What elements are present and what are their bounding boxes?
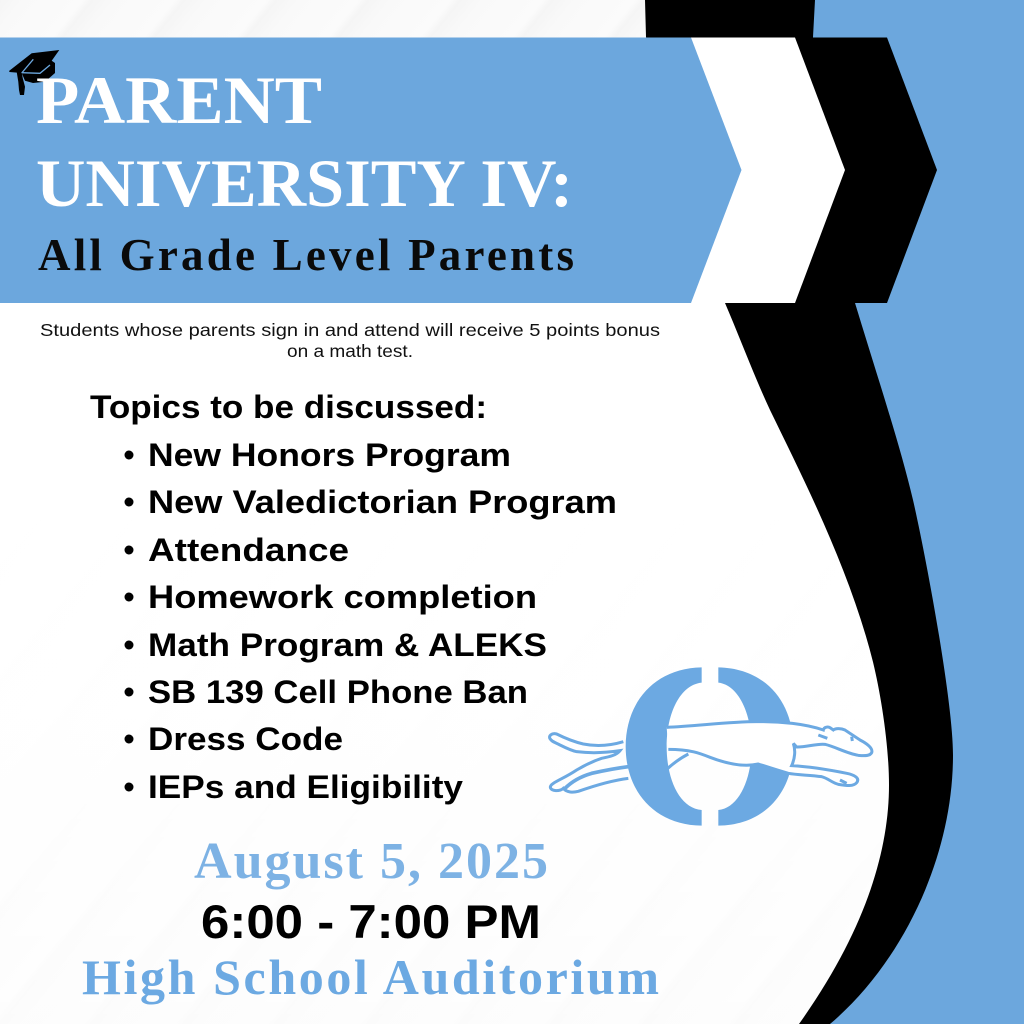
date: August 5, 2025	[194, 833, 548, 890]
topics heading: Topics to be discussed:	[90, 389, 487, 425]
black chevron	[780, 38, 937, 303]
title: UNIVERSITY IV:	[36, 145, 573, 221]
time: 6:00 - 7:00 PM	[201, 895, 541, 948]
title	[36, 62, 573, 221]
black swoosh	[645, 0, 953, 1024]
bonus note: Students whose parents sign in and attend will receive 5 points bonus	[40, 320, 660, 340]
item: Homework completion	[148, 579, 537, 615]
item: New Valedictorian Program	[148, 484, 617, 520]
item: Attendance	[148, 532, 349, 568]
topics list	[124, 437, 617, 805]
item: IEPs and Eligibility	[148, 769, 463, 805]
location: High School Auditorium	[82, 949, 659, 1005]
banner	[0, 38, 937, 303]
bonus note: on a math test.	[287, 341, 413, 361]
item: Dress Code	[148, 721, 343, 757]
item: SB 139 Cell Phone Ban	[148, 674, 528, 710]
item: New Honors Program	[148, 437, 511, 473]
blue right panel	[780, 0, 1024, 1024]
bonus note	[40, 320, 660, 361]
white chevron	[680, 38, 845, 303]
subtitle: All Grade Level Parents	[38, 230, 574, 280]
blue banner	[0, 38, 742, 303]
title: PARENT	[36, 62, 322, 138]
icon: graduation cap	[9, 50, 59, 95]
logo: letter O with greyhound	[550, 667, 872, 826]
item: Math Program & ALEKS	[148, 627, 547, 663]
